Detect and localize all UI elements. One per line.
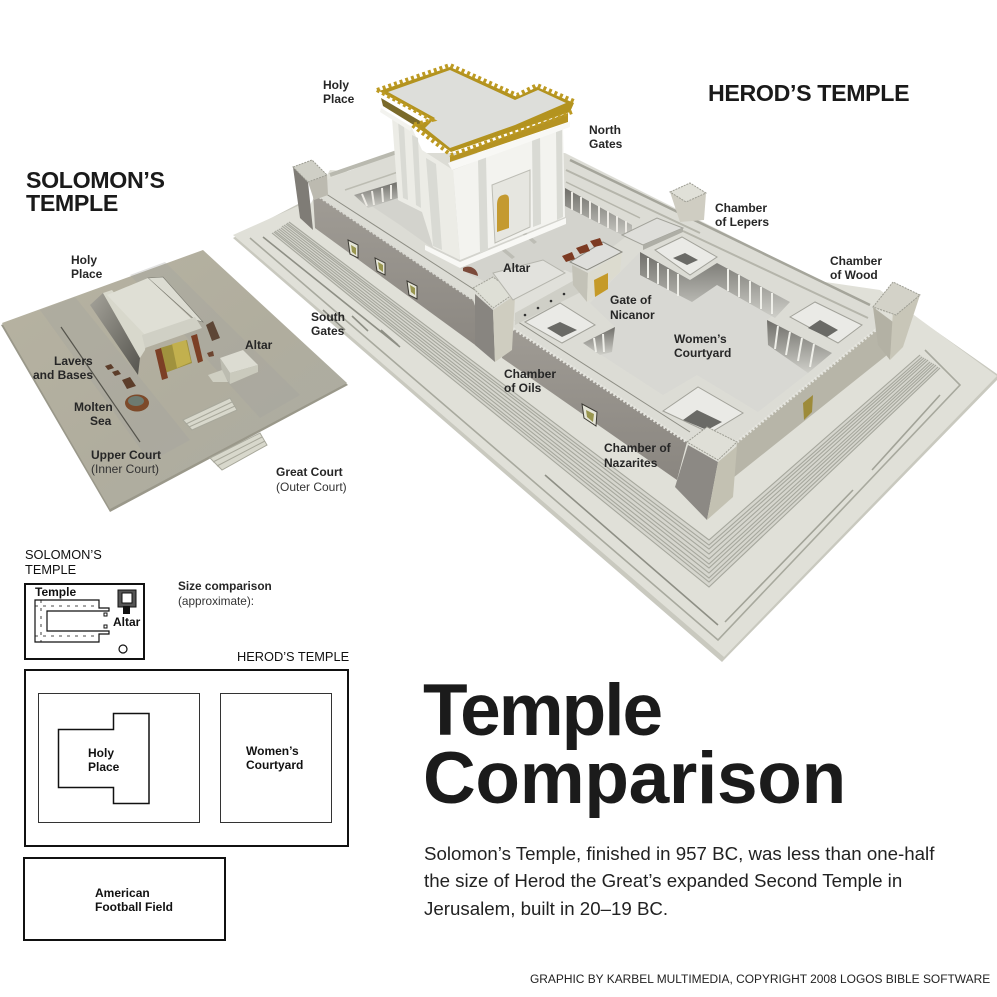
title: Comparison (423, 738, 846, 819)
size comparison: Herod's Temple plan: Courtyard (246, 758, 303, 772)
heading: Herod's Temple: HEROD’S TEMPLE (708, 80, 909, 106)
size comparison: Herod's Temple plan: Holy (88, 746, 114, 760)
labels: Herod's Temple: Women’s (674, 332, 727, 346)
description: the size of Herod the Great’s expanded Second Temple in (424, 870, 902, 891)
size comparison: Herod's Temple plan: HEROD’S TEMPLE (237, 649, 349, 664)
south wall (313, 193, 687, 480)
title (423, 670, 846, 819)
size comparison: Solomon's Temple plan: TEMPLE (25, 562, 76, 577)
labels: Solomon's Temple: Lavers (54, 354, 93, 368)
labels: Solomon's Temple: Altar (245, 338, 273, 352)
illustration: Herod's Temple (233, 65, 997, 662)
stepped terrace (272, 222, 940, 587)
court steps (183, 398, 267, 470)
labels: Herod's Temple: Gates (589, 137, 623, 151)
size comparison: Solomon's Temple plan (25, 547, 144, 659)
corner towers (293, 160, 920, 520)
size comparison: Solomon's Temple plan: Temple (35, 585, 76, 599)
labels: Herod's Temple: Chamber (830, 254, 882, 268)
labels: Solomon's Temple: Place (71, 267, 103, 281)
lavers and bases (105, 364, 136, 389)
description (424, 843, 935, 919)
labels: Solomon's Temple: Holy (71, 253, 97, 267)
molten sea (125, 394, 149, 412)
temple platform (233, 203, 997, 662)
Holy Place building (377, 65, 576, 268)
credit: GRAPHIC BY KARBEL MULTIMEDIA, COPYRIGHT 2008 LOGOS BIBLE SOFTWARE (530, 972, 990, 986)
labels: Herod's Temple: of Wood (830, 268, 878, 282)
labels: Herod's Temple: North (589, 123, 621, 137)
illustration: Solomon's Temple (1, 250, 348, 512)
labels: Solomon's Temple (33, 253, 347, 494)
size comparison: Herod's Temple plan: Women’s (246, 744, 299, 758)
outer walkway between wall and steps (300, 170, 900, 528)
labels: Solomon's Temple: (Inner Court) (91, 462, 159, 476)
labels: Solomon's Temple: Molten (74, 400, 113, 414)
labels: Herod's Temple: Nicanor (610, 308, 655, 322)
labels: Herod's Temple: Altar (503, 261, 531, 275)
altar (208, 350, 258, 384)
labels: Herod's Temple: Nazarites (604, 456, 658, 470)
size comparison: Solomon's Temple plan: SOLOMON’S (25, 547, 102, 562)
east wall (733, 320, 897, 478)
labels: Herod's Temple: Chamber of (604, 441, 672, 455)
gates in walls (348, 240, 813, 426)
labels: Herod's Temple: South (311, 310, 345, 324)
inner court roof area (313, 152, 890, 442)
labels: Solomon's Temple: and Bases (33, 368, 93, 382)
heading: Solomon's Temple: TEMPLE (26, 190, 118, 216)
women's courtyard floor (583, 252, 832, 412)
size comparison: American football field (24, 858, 225, 940)
labels: Herod's Temple: Chamber (504, 367, 556, 381)
title: Temple (423, 670, 662, 751)
labels: Herod's Temple: Holy (323, 78, 349, 92)
court of priests floor (355, 184, 632, 292)
labels: Solomon's Temple: Upper Court (91, 448, 161, 462)
size comparison: American football field: Football Field (95, 900, 173, 914)
description: Jerusalem, built in 20–19 BC. (424, 898, 668, 919)
labels: Solomon's Temple: (Outer Court) (276, 480, 347, 494)
labels: Solomon's Temple: Great Court (276, 465, 343, 479)
heading: Solomon's Temple: SOLOMON’S (26, 167, 165, 193)
labels: Herod's Temple: Courtyard (674, 346, 731, 360)
labels: Herod's Temple (311, 78, 882, 470)
heading: Solomon's Temple (26, 167, 165, 216)
size comparison: Herod's Temple plan (25, 649, 349, 846)
labels: Herod's Temple: Chamber (715, 201, 767, 215)
temple building (90, 277, 220, 380)
court platform (1, 250, 348, 512)
Gate of Nicanor and connecting wings (515, 218, 683, 325)
labels: Herod's Temple: Gate of (610, 293, 652, 307)
size comparison: Solomon's Temple plan: Altar (113, 615, 141, 629)
size comparison: Herod's Temple plan: Place (88, 760, 120, 774)
rooftop chambers (525, 237, 862, 433)
size comparison caption (178, 579, 272, 608)
labels: Herod's Temple: Gates (311, 324, 345, 338)
size comparison caption: (approximate): (178, 594, 254, 608)
north colonnade (354, 182, 632, 240)
description: Solomon’s Temple, finished in 957 BC, was less than one-half (424, 843, 935, 864)
size comparison caption: Size comparison (178, 579, 272, 593)
size comparison: American football field: American (95, 886, 150, 900)
women's courtyard colonnades (583, 252, 832, 373)
altar and lavers (463, 230, 603, 300)
labels: Herod's Temple: Place (323, 92, 355, 106)
labels: Solomon's Temple: Sea (90, 414, 112, 428)
labels: Herod's Temple: of Oils (504, 381, 542, 395)
labels: Herod's Temple: of Lepers (715, 215, 769, 229)
